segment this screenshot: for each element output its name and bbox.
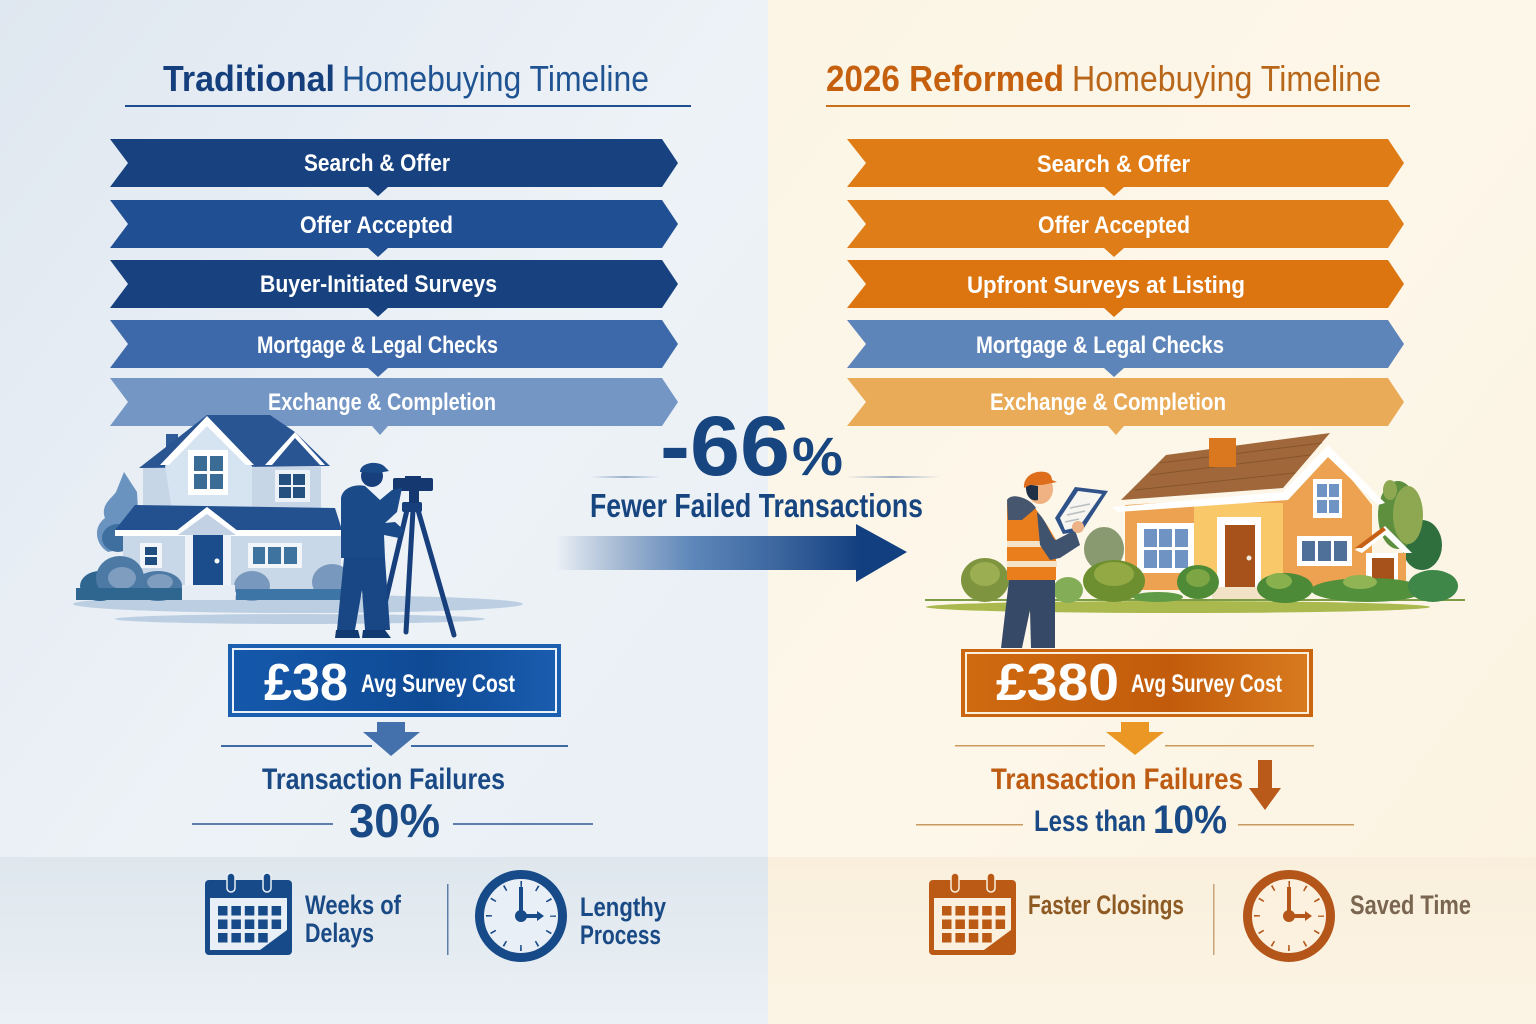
stat: traditional transaction failures bbox=[192, 763, 593, 847]
heading: traditional timeline: Traditional bbox=[163, 58, 335, 99]
tree behind house bbox=[1378, 480, 1442, 570]
cost box: traditional survey cost bbox=[228, 644, 561, 717]
cost box: reformed survey cost: £380 bbox=[996, 654, 1119, 712]
heading: reformed timeline: 2026 Reformed bbox=[826, 58, 1064, 99]
lawn bbox=[925, 599, 1465, 613]
label: faster closings: Faster Closings bbox=[1028, 890, 1184, 920]
cost box: traditional survey cost: Avg Survey Cost bbox=[361, 670, 516, 698]
illustration: traditional house bbox=[73, 415, 523, 624]
heading: traditional timeline bbox=[125, 58, 691, 107]
callout: minus 66 percent fewer failed transactions: % bbox=[792, 427, 843, 487]
heading: reformed timeline: Homebuying Timeline bbox=[1072, 58, 1381, 99]
cost box: traditional survey cost: £38 bbox=[264, 654, 348, 712]
step: upfront surveys at listing bbox=[847, 260, 1404, 317]
stat: traditional transaction failures: Transaction Failures bbox=[262, 763, 505, 796]
arrow: traditional down bbox=[221, 722, 568, 756]
front steps bbox=[182, 585, 235, 600]
step: buyer-initiated surveys bbox=[110, 260, 678, 317]
label: lengthy process: Lengthy bbox=[580, 892, 666, 922]
timeline: reformed steps bbox=[847, 139, 1404, 435]
step: buyer-initiated surveys: Buyer-Initiated Surveys bbox=[260, 271, 497, 298]
step: mortgage and legal checks: Mortgage & Legal Checks bbox=[976, 332, 1224, 359]
callout: minus 66 percent fewer failed transactions: Fewer Failed Transactions bbox=[590, 487, 923, 524]
shrubs: left of door bbox=[76, 556, 184, 601]
cost box: reformed survey cost bbox=[961, 649, 1313, 717]
heading: traditional timeline: Homebuying Timeline bbox=[342, 58, 649, 99]
icon: reformed clock bbox=[1213, 874, 1330, 958]
stat: reformed transaction failures bbox=[916, 760, 1354, 842]
timeline: traditional steps bbox=[110, 139, 678, 435]
label: weeks of delays: Weeks of bbox=[305, 890, 402, 920]
step: search and offer: Search & Offer bbox=[304, 150, 450, 177]
shrubs: right of door bbox=[234, 564, 352, 601]
label: lengthy process bbox=[580, 892, 666, 950]
panel: reformed background bbox=[768, 0, 1536, 1024]
label: saved time: Saved Time bbox=[1350, 890, 1471, 920]
step: offer accepted bbox=[110, 200, 678, 257]
step: exchange and completion: Exchange & Completion bbox=[268, 389, 496, 416]
step: upfront surveys at listing: Upfront Surveys at Listing bbox=[967, 272, 1245, 299]
label: weeks of delays: Delays bbox=[305, 918, 374, 948]
step: search and offer bbox=[110, 139, 678, 196]
panel: traditional background bbox=[0, 0, 768, 1024]
garden shrubs bbox=[961, 558, 1458, 603]
step: mortgage and legal checks bbox=[847, 320, 1404, 377]
label: lengthy process: Process bbox=[580, 920, 661, 950]
step: exchange and completion bbox=[847, 378, 1404, 435]
illustration: surveyor with tripod bbox=[335, 463, 454, 638]
icon: traditional calendar bbox=[205, 873, 292, 955]
arrow: reformed down bbox=[955, 722, 1314, 755]
step: search and offer bbox=[847, 139, 1404, 196]
callout: minus 66 percent fewer failed transactions bbox=[590, 399, 940, 524]
label: weeks of delays bbox=[305, 890, 402, 948]
step: mortgage and legal checks bbox=[110, 320, 678, 377]
step: offer accepted bbox=[847, 200, 1404, 257]
illustration: inspector with clipboard bbox=[1001, 472, 1108, 648]
stat: reformed transaction failures: Transaction Failures bbox=[991, 763, 1243, 796]
step: search and offer: Search & Offer bbox=[1037, 151, 1190, 178]
stat: reformed transaction failures: 10% bbox=[1153, 798, 1227, 842]
icon: reformed calendar bbox=[929, 873, 1016, 955]
step: exchange and completion bbox=[110, 378, 678, 435]
cost box: reformed survey cost: Avg Survey Cost bbox=[1131, 670, 1283, 698]
step: offer accepted: Offer Accepted bbox=[300, 212, 453, 239]
arrow: traditional to reformed bbox=[555, 524, 907, 582]
callout: minus 66 percent fewer failed transactions: -66 bbox=[660, 399, 790, 493]
step: offer accepted: Offer Accepted bbox=[1038, 212, 1190, 239]
heading: reformed timeline bbox=[826, 58, 1410, 107]
step: exchange and completion: Exchange & Completion bbox=[990, 389, 1226, 416]
step: mortgage and legal checks: Mortgage & Legal Checks bbox=[257, 332, 498, 359]
stat: traditional transaction failures: 30% bbox=[349, 794, 440, 847]
illustration: reformed house bbox=[925, 433, 1465, 613]
stat: reformed transaction failures: Less than bbox=[1034, 805, 1146, 838]
icon: traditional clock bbox=[447, 874, 562, 958]
